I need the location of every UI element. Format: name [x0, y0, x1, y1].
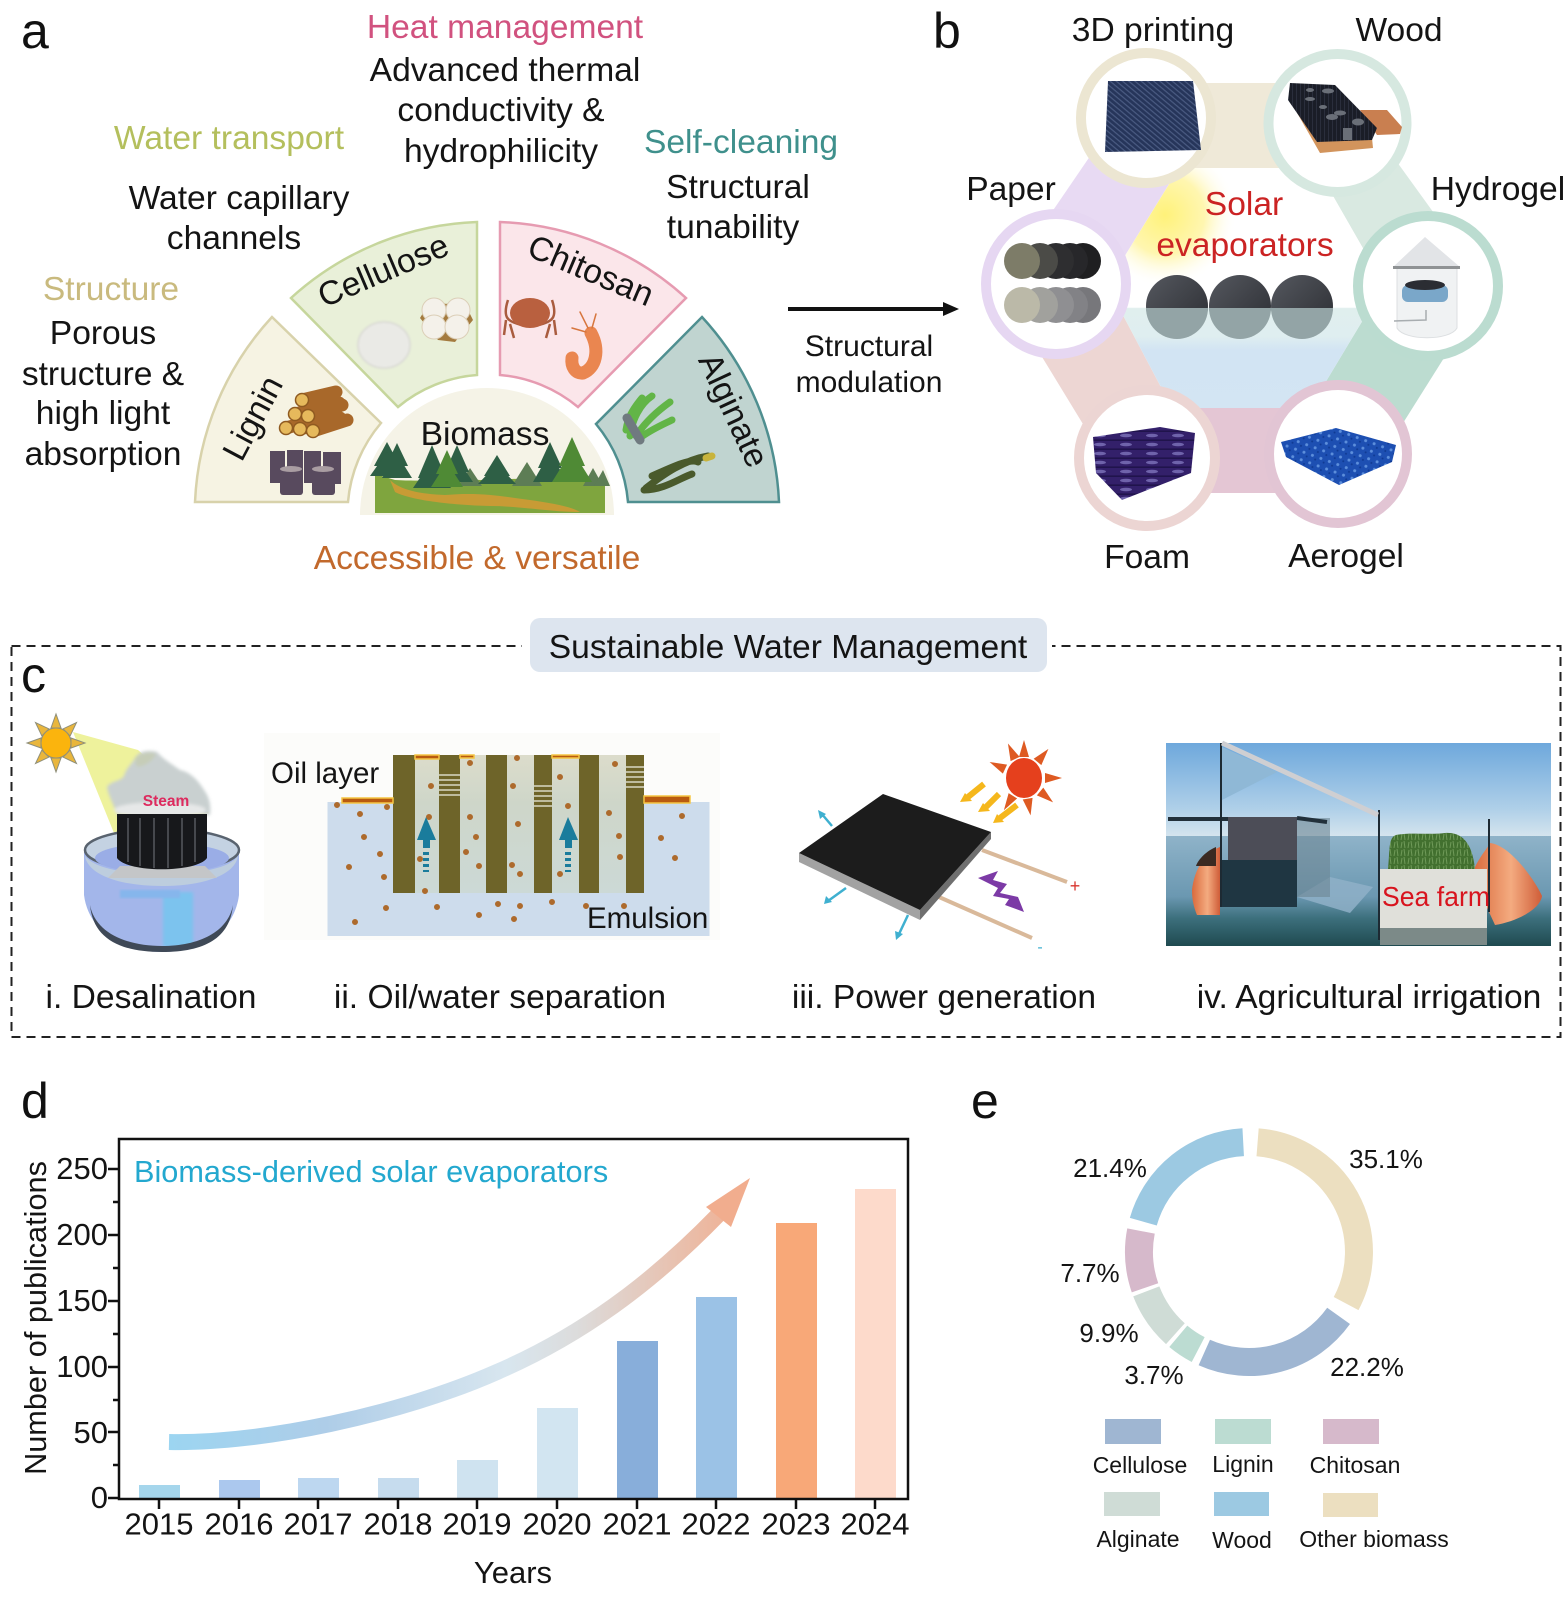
x axis labels: 2023 — [762, 1506, 830, 1542]
node: hydrogel — [1358, 216, 1498, 356]
text: water capillary channels — [129, 180, 350, 257]
x axis title: Years — [474, 1555, 552, 1590]
x axis labels: 2021 — [603, 1506, 671, 1542]
center: biomass landscape — [360, 388, 614, 515]
icon: green seaweed — [626, 396, 672, 440]
x axis labels: 2020 — [523, 1506, 591, 1542]
polarity marks — [1037, 876, 1080, 956]
sun rays arrows — [960, 784, 1017, 823]
y axis labels: 0 — [91, 1480, 108, 1515]
donut value labels — [1060, 1144, 1423, 1390]
panel d: publications bar chart — [18, 1073, 909, 1590]
polarity marks: + — [1070, 876, 1080, 896]
y axis labels: 250 — [56, 1151, 108, 1186]
chart legend text: Biomass-derived solar evaporators — [134, 1154, 608, 1189]
text: structural modulation: Structural — [805, 330, 933, 363]
node: 3D printing — [1081, 53, 1211, 183]
panel label e: e — [971, 1073, 999, 1129]
legend: Cellulose — [1093, 1452, 1187, 1478]
label: oil layer: Oil layer — [271, 757, 379, 790]
thermoelectric rods — [939, 850, 1067, 938]
icon: brown kelp — [644, 456, 712, 490]
heat arrows — [818, 810, 908, 940]
steam — [107, 751, 210, 818]
caption ii: ii. Oil/water separation — [334, 979, 666, 1016]
x axis labels — [125, 1506, 909, 1542]
icon: cotton boll — [420, 298, 473, 342]
sector: chitosan: Chitosan — [522, 228, 659, 314]
sector: lignin: Lignin — [216, 370, 291, 467]
donut value labels: 3.7% — [1124, 1360, 1184, 1390]
text: porous structure: high light — [36, 395, 171, 432]
label: wood: Wood — [1355, 12, 1443, 49]
legend: Chitosan — [1310, 1452, 1400, 1478]
sector: lignin — [195, 317, 381, 502]
text: structural modulation — [796, 330, 942, 399]
x axis labels: 2019 — [443, 1506, 511, 1542]
heading: water transport: Water transport — [114, 120, 345, 157]
title pill: Sustainable Water Management — [549, 629, 1028, 666]
text: advanced thermal conductivity: Advanced thermal — [370, 52, 640, 89]
text: porous structure: structure & — [22, 356, 184, 393]
node: paper — [986, 214, 1126, 354]
flow arrows — [417, 817, 578, 872]
plate — [799, 794, 991, 920]
caption i: i. Desalination — [46, 979, 256, 1016]
membrane bars — [393, 755, 644, 893]
center: biomass landscape: Biomass — [421, 416, 549, 453]
illustration: forest — [370, 437, 610, 513]
planter — [1380, 833, 1487, 945]
structure — [1168, 743, 1489, 940]
donut value labels: 7.7% — [1060, 1258, 1120, 1288]
arrow: structural modulation — [788, 302, 959, 316]
text: structural tunability: tunability — [667, 209, 799, 246]
icon: crab — [504, 298, 556, 338]
polarity marks: - — [1037, 939, 1043, 956]
chart frame and ticks — [108, 1139, 908, 1509]
sector: chitosan — [500, 222, 686, 407]
evaporator spheres — [1146, 275, 1333, 339]
label: foam: Foam — [1104, 539, 1190, 576]
x axis labels: 2017 — [284, 1506, 352, 1542]
sector: cellulose — [291, 222, 477, 407]
buoys — [1192, 843, 1542, 925]
donut value labels: 22.2% — [1330, 1352, 1404, 1382]
legend: Lignin — [1212, 1451, 1274, 1477]
bars — [139, 1189, 896, 1499]
text: porous structure — [22, 315, 184, 473]
panel label c: c — [21, 647, 46, 703]
x axis labels: 2016 — [205, 1506, 273, 1542]
hexagon bands — [1000, 83, 1488, 493]
light beam — [73, 732, 209, 833]
icon: sun — [27, 714, 85, 772]
caption iv: iv. Agricultural irrigation — [1197, 979, 1541, 1016]
text: water capillary channels: channels — [167, 220, 301, 257]
node: wood — [1268, 54, 1406, 192]
panel b: solar evaporator hexagon — [933, 3, 1565, 576]
trend arrow — [169, 1178, 750, 1442]
title: solar evaporators: evaporators — [1156, 227, 1334, 264]
icon: tree stumps — [270, 450, 341, 495]
node: foam — [1079, 390, 1215, 526]
illustration: desalination — [27, 714, 239, 952]
photo: sea farm — [1166, 743, 1551, 946]
text: water capillary channels: Water capillary — [129, 180, 350, 217]
translucent sail — [1222, 747, 1277, 800]
x axis labels: 2018 — [364, 1506, 432, 1542]
icon: logs — [280, 392, 347, 438]
panel c: sustainable water management — [12, 618, 1560, 1037]
y axis labels: 100 — [56, 1349, 108, 1384]
heading: self-cleaning: Self-cleaning — [644, 124, 838, 161]
panel a: biomass fan — [21, 3, 959, 577]
text: advanced thermal conductivity: conductivity & — [397, 92, 605, 129]
x axis labels: 2022 — [682, 1506, 750, 1542]
oil layers — [342, 755, 690, 803]
panel label b: b — [933, 3, 961, 59]
title: solar evaporators — [1156, 186, 1334, 264]
donut value labels: 35.1% — [1349, 1144, 1423, 1174]
y axis labels: 200 — [56, 1217, 108, 1252]
label: emulsion: Emulsion — [587, 902, 708, 935]
panel e: donut chart — [971, 1073, 1449, 1553]
steam label: Steam — [143, 793, 189, 810]
text: advanced thermal conductivity: hydrophilicity — [404, 133, 598, 170]
illustration: oil water separation — [264, 733, 720, 940]
legend: Alginate — [1096, 1526, 1180, 1552]
icon: shrimp — [572, 312, 596, 373]
donut segments — [1139, 1142, 1359, 1362]
legend — [1093, 1419, 1449, 1553]
title: solar evaporators: Solar — [1205, 186, 1283, 223]
y axis labels: 50 — [74, 1415, 108, 1450]
node: aerogel — [1269, 385, 1407, 523]
text: porous structure: Porous — [50, 315, 156, 352]
label: hydrogel: Hydrogel — [1431, 171, 1565, 208]
panel label a: a — [21, 3, 49, 59]
y axis title: Number of publications — [18, 1161, 53, 1475]
label: aerogel: Aerogel — [1288, 538, 1404, 575]
icon: cellulose fibre ball — [358, 322, 410, 368]
donut value labels: 21.4% — [1073, 1153, 1147, 1183]
sector: cellulose: Cellulose — [313, 227, 454, 315]
label: sea farm: Sea farm — [1382, 881, 1490, 912]
donut value labels: 9.9% — [1079, 1318, 1139, 1348]
text: porous structure: absorption — [25, 436, 181, 473]
x axis labels: 2015 — [125, 1506, 193, 1542]
bowl — [84, 829, 239, 952]
caption iii: iii. Power generation — [792, 979, 1096, 1016]
text: structural tunability — [666, 169, 810, 246]
sector: alginate: Alginate — [690, 348, 775, 473]
illustration: power generation — [799, 740, 1080, 956]
text: structural modulation: modulation — [796, 366, 942, 399]
panel label d: d — [21, 1073, 49, 1129]
x axis labels: 2024 — [841, 1506, 909, 1542]
icon: lightning — [978, 871, 1024, 912]
legend: Wood — [1212, 1527, 1272, 1553]
sector: alginate — [596, 317, 779, 502]
title pill — [530, 618, 1047, 672]
label: paper: Paper — [966, 171, 1056, 208]
label: 3D printing: 3D printing — [1072, 12, 1234, 49]
heading: accessible and versatile: Accessible & versatile — [314, 540, 640, 577]
legend: Other biomass — [1299, 1526, 1449, 1552]
black evaporator — [108, 814, 217, 878]
y axis labels — [56, 1151, 108, 1515]
heading: heat management: Heat management — [367, 9, 644, 46]
text: structural tunability: Structural — [666, 169, 810, 206]
icon: red sun — [987, 740, 1062, 816]
y axis labels: 150 — [56, 1283, 108, 1318]
centre: evaporators on water — [1107, 168, 1384, 408]
heading: structure: Structure — [43, 271, 179, 308]
emulsion droplets — [337, 758, 682, 922]
text: advanced thermal conductivity — [370, 52, 640, 170]
